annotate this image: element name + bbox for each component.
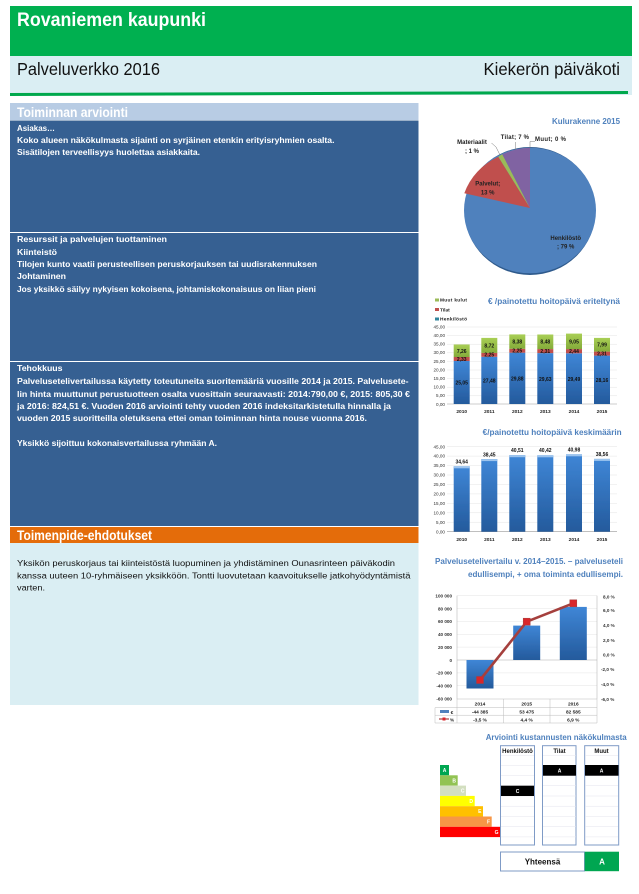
chart title: edullisempi, + oma toiminta edullisempi. [468,570,623,579]
chart: voucher comparison combo: 6,0 % [603,608,615,613]
chart: stacked bars per weighted care day: 2,25 [512,349,522,355]
chart: pie Kulurakenne 2015: 13 % [481,190,495,196]
panel: Asiakas: Asiakas… [17,123,55,133]
subtitle: service network: Palveluverkko 2016 [17,59,160,79]
heading: Toiminnan arviointi: Toiminnan arviointi [17,104,128,120]
chart: stacked bars per weighted care day: 7,99 [597,342,607,348]
chart: stacked bars per weighted care day: 27,48 [483,378,496,384]
chart: stacked bars per weighted care day: 2,25 [484,353,494,359]
heading: Toiminnan arviointi [10,103,418,120]
chart: average per weighted care day: 40,51 [511,448,524,454]
chart: average per weighted care day: 2014 [569,537,580,543]
chart: voucher comparison combo: -6,0 % [601,697,614,702]
data table [435,699,597,724]
heading: Toimenpide-ehdotukset: Toimenpide-ehdotukset [17,528,152,543]
energy-style scale A–G: A [443,768,447,774]
legend: Tilat [440,308,450,314]
chart: pie Kulurakenne 2015 [457,117,621,275]
chart: voucher comparison combo: 60 000 [438,619,452,624]
chart: stacked bars per weighted care day: 28,16 [596,378,608,384]
chart: stacked bars per weighted care day: 8,48 [540,340,550,346]
panel: Tehokkuus: ja 2016: 824,51 €. Vuoden 2016 arviointi tehty vuoden 2016 indeksitarkistetulla hinnalla ja [16,401,391,411]
data table: 53 475 [519,710,534,716]
data table: 82 585 [566,710,581,716]
chart: stacked bars per weighted care day: 2,31 [597,352,607,358]
chart: pie Kulurakenne 2015: ; 1 % [465,149,480,155]
panel: Tehokkuus: Palvelusetelivertailussa käytetty toteutuneita suoritemääriä vuosille 2014 ja 2015. Palvelusete- [17,376,409,386]
chart: pie Kulurakenne 2015: Muut; 0 % [535,137,567,143]
chart: voucher comparison combo: 20 000 [438,645,452,650]
chart: voucher comparison combo: 100 000 [435,594,452,598]
chart title: Arviointi kustannusten näkökulmasta [486,733,627,742]
total rating [500,852,619,871]
chart: stacked bars per weighted care day: 8,72 [484,344,494,350]
energy-style scale A–G: D [469,799,473,805]
subheader band [10,56,632,96]
title: Rovaniemen kaupunki [17,10,206,31]
panel: Resurssit ja palvelujen tuottaminen: Kiinteistö [17,247,57,257]
chart: stacked bars per weighted care day: 29,63 [539,377,552,383]
chart: stacked bars per weighted care day: 25,05 [455,380,468,386]
chart: average per weighted care day [434,428,622,543]
chart title: € /painotettu hoitopäivä eriteltynä [488,297,621,306]
chart: stacked bars per weighted care day: 45,00 [434,324,445,330]
chart: average per weighted care day: 2012 [512,537,523,543]
chart title: €/painotettu hoitopäivä keskimäärin [483,428,622,437]
subtitle: unit name: Kiekerön päiväkoti [484,59,620,79]
chart: average per weighted care day: 2013 [540,537,551,543]
chart: voucher comparison combo: -60 000 [436,697,452,702]
chart: voucher comparison combo: 40 000 [438,632,452,637]
chart: average per weighted care day: 2010 [456,537,467,543]
panel: Tehokkuus: Tehokkuus [17,363,63,373]
chart: voucher comparison combo: -40 000 [436,684,452,688]
chart: stacked bars per weighted care day: 2013 [540,409,551,415]
chart: stacked bars per weighted care day: 30,00 [434,350,445,355]
chart: stacked bars per weighted care day: 2010 [456,409,467,415]
chart: voucher comparison combo [435,557,623,724]
chart: stacked bars per weighted care day: 29,88 [511,376,524,382]
data table: % [450,718,455,724]
column: Muut [585,746,619,845]
chart: voucher comparison combo: 4,0 % [603,623,615,628]
legend: Henkilöstö [440,317,467,323]
column: Muut: Muut [594,749,609,755]
chart: pie Kulurakenne 2015: ; 79 % [557,244,575,250]
chart: stacked bars per weighted care day: 9,05 [569,340,579,346]
chart: average per weighted care day: 38,56 [596,452,608,458]
chart: average per weighted care day: 15,00 [434,501,445,506]
data table: 4,4 % [521,718,534,724]
chart: stacked bars per weighted care day: 8,38 [512,340,522,346]
panel: Resurssit ja palvelujen tuottaminen [10,233,418,361]
chart title [435,557,623,579]
panel: Resurssit ja palvelujen tuottaminen: Tilojen kunto vaatii perusteellisen peruskorjauksen tai uudisrakennuksen [17,259,317,269]
energy-style scale A–G: E [478,809,482,815]
panel: Asiakas: Koko alueen näkökulmasta sijainti on syrjäinen etenkin erityisryhmien osalta. [17,135,334,145]
legend [435,298,467,323]
chart: stacked bars per weighted care day: 2,31 [540,349,550,355]
chart: average per weighted care day: 34,64 [455,460,468,466]
data table: 2014 [475,702,486,708]
chart: voucher comparison combo: -4,0 % [601,682,614,687]
chart: stacked bars per weighted care day [434,297,621,415]
panel: Resurssit ja palvelujen tuottaminen: Johtaminen [17,271,66,281]
panel: Tehokkuus: Yksikkö sijoittuu kokonaisvertailussa ryhmään A. [17,438,217,448]
chart: pie Kulurakenne 2015: Henkilöstö [550,236,581,242]
chart: stacked bars per weighted care day: 2012 [512,409,523,415]
chart: stacked bars per weighted care day: 40,00 [434,333,445,338]
panel: Tehokkuus: vuoden 2015 suoritteilla oletuksena ettei oman toiminnan hinta nouse vuonna 2016. [17,413,367,423]
chart: stacked bars per weighted care day: 10,00 [434,385,445,390]
chart: stacked bars per weighted care day: 29,49 [568,377,580,383]
chart: stacked bars per weighted care day: 2,33 [457,357,467,363]
chart: stacked bars per weighted care day: 2011 [484,409,495,415]
rating: cost perspective [440,733,627,871]
chart: average per weighted care day: 0,00 [436,529,445,534]
chart: stacked bars per weighted care day: 2014 [569,409,580,415]
data table: -44 385 [472,710,488,716]
energy-style scale A–G: F [487,820,490,826]
chart: average per weighted care day: 38,45 [483,452,496,458]
chart: voucher comparison combo: -2,0 % [601,667,614,672]
energy-style scale A–G [440,765,500,837]
chart: average per weighted care day: 35,00 [434,463,445,468]
chart: average per weighted care day: 2015 [597,537,608,543]
total rating: A [599,858,605,866]
chart: average per weighted care day: 10,00 [434,510,445,515]
panel: Toimenpide-ehdotukset text: Yksikön peruskorjaus tai kiinteistöstä luopuminen ja yhdistäminen Ounasrinteen päiväkodin [17,558,395,568]
panel: Resurssit ja palvelujen tuottaminen: Resurssit ja palvelujen tuottaminen [17,234,167,244]
legend: Muut kulut [440,298,467,304]
header band: city [10,6,632,56]
chart: voucher comparison combo: -20 000 [436,671,452,676]
chart: stacked bars per weighted care day: 15,00 [434,376,445,381]
chart: average per weighted care day: 25,00 [434,482,445,487]
panel: Toimenpide-ehdotukset text: varten. [17,582,45,592]
panel: Asiakas: Sisätilojen terveellisyys huolettaa asiakkaita. [17,147,200,157]
chart: average per weighted care day: 30,00 [434,473,445,478]
chart: voucher comparison combo: 8,0 % [603,594,615,600]
chart: average per weighted care day: 20,00 [434,492,445,496]
chart title: Palvelusetelivertailu v. 2014–2015. – palveluseteli [435,557,623,566]
panel: Tehokkuus: lin hinta muuttunut perustuotteen osalta vuosittain seuraavasti: 2014:790,00 €, 2015: 805,30 € [17,389,410,399]
data table: 6,9 % [567,718,580,724]
data table: € [451,710,454,716]
data table: 2016 [568,702,579,708]
column: Tilat [542,746,576,845]
column: Tilat: Tilat [553,749,566,755]
data table: 2015 [521,702,532,708]
chart: stacked bars per weighted care day: 7,26 [457,349,467,355]
chart title: Kulurakenne 2015 [552,117,621,126]
chart: stacked bars per weighted care day: 35,00 [434,342,445,347]
chart: voucher comparison combo: 2,0 % [603,638,615,643]
column: Muut: A [600,768,604,774]
chart: pie Kulurakenne 2015: Tilat; 7 % [501,135,530,141]
chart: stacked bars per weighted care day: 0,00 [436,402,445,407]
energy-style scale A–G: G [495,830,499,836]
column: Henkilöstö [500,746,534,845]
total rating: Yhteensä [525,858,561,866]
chart: average per weighted care day: 40,98 [568,448,580,454]
chart: voucher comparison combo: 80 000 [438,606,452,611]
chart: average per weighted care day: 5,00 [436,520,445,525]
chart: stacked bars per weighted care day: 20,00 [434,367,445,372]
chart: average per weighted care day: 40,00 [434,454,445,459]
panel: Tehokkuus [10,362,418,526]
column: Henkilöstö: C [516,789,520,795]
chart: pie Kulurakenne 2015: Materiaalit [457,140,487,146]
chart: pie Kulurakenne 2015: Palvelut; [475,182,500,188]
chart: average per weighted care day: 40,42 [539,448,552,454]
panel: Asiakas [10,120,418,232]
chart: stacked bars per weighted care day: 5,00 [436,393,445,398]
panel: Toimenpide-ehdotukset text: kanssa uuteen 10-ryhmäiseen yksikköön. Tontti luovutetaan kaavoitukselle jatkohyödyntämistä [17,570,411,580]
energy-style scale A–G: C [461,789,465,795]
panel: Toimenpide-ehdotukset text [10,543,418,705]
column: Tilat: A [558,768,562,774]
heading: Toimenpide-ehdotukset [10,527,418,543]
chart: average per weighted care day: 2011 [484,537,495,543]
chart: stacked bars per weighted care day: 2015 [597,409,608,415]
data table: -3,5 % [473,718,488,724]
energy-style scale A–G: B [452,778,456,784]
panel: Resurssit ja palvelujen tuottaminen: Jos yksikkö säilyy nykyisen kokoisena, johtamiskokonaisuus on liian pieni [17,284,316,294]
chart: stacked bars per weighted care day: 2,44 [569,349,579,355]
chart: average per weighted care day: 45,00 [434,444,445,449]
chart: voucher comparison combo: 0 [449,658,452,663]
column: Henkilöstö: Henkilöstö [502,749,533,755]
chart: stacked bars per weighted care day: 25,00 [434,359,445,364]
chart: voucher comparison combo: 0,0 % [603,652,615,658]
